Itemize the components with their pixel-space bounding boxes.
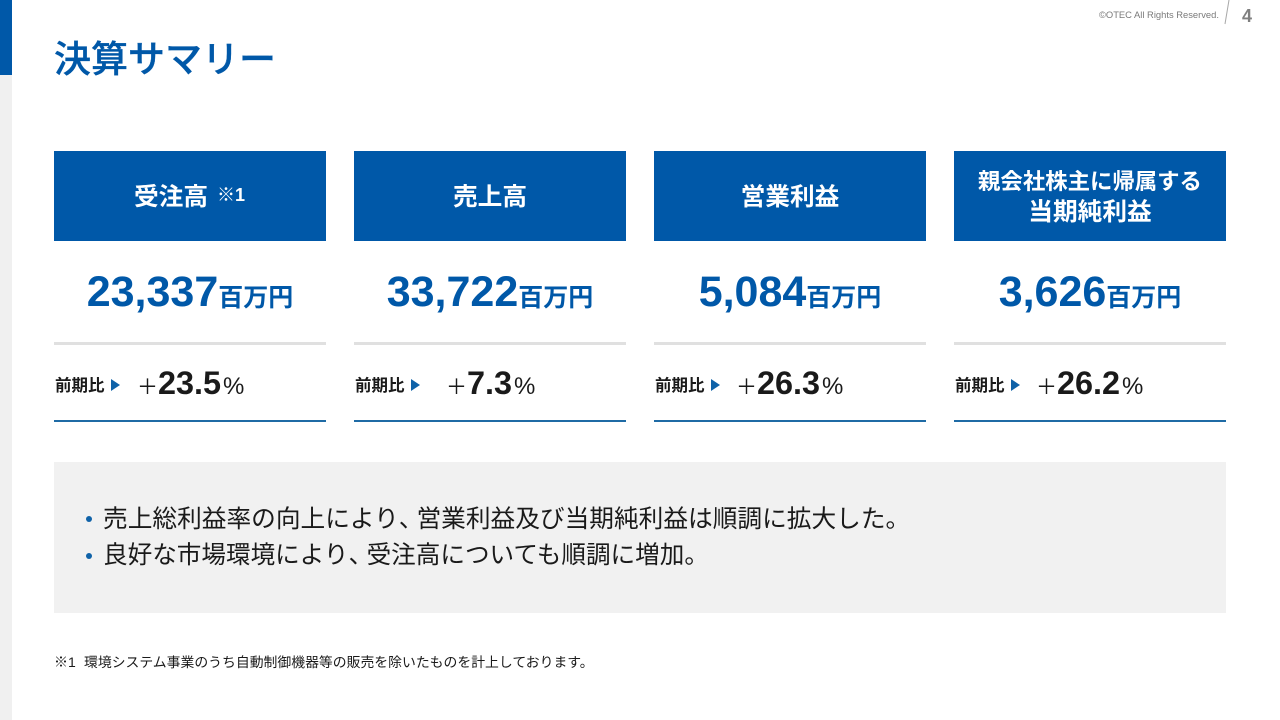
panel: operating profit header: 営業利益 [741,184,839,211]
commentary line 1: 売上総利益率の向上により、営業利益及び当期純利益は順調に拡大した。 [103,506,910,533]
net income bottom rule [954,420,1226,422]
net income divider [954,342,1226,345]
panel: operating profit header [654,151,926,241]
net income yoy change: ＋26.2% [1036,365,1143,401]
panel: sales header: 売上高 [453,184,527,211]
bullet 1 [86,516,92,522]
operating profit bottom rule [654,420,926,422]
net income yoy label: 前期比 [955,377,1004,395]
page number divider [1224,0,1230,24]
operating profit yoy change: ＋26.3% [736,365,843,401]
panel: net income header: 当期純利益 [1028,199,1152,226]
page number: 4 [1242,6,1252,26]
panel: net income header [954,151,1226,241]
operating profit value: 5,084百万円 [699,268,881,316]
sales value: 33,722百万円 [387,268,593,316]
sales yoy label: 前期比 [355,377,404,395]
left sidebar strip [0,0,12,720]
icon: net income triangle [1011,379,1020,391]
footnote marker: ※1 [54,654,76,670]
icon: orders triangle [111,379,120,391]
panel: net income header: 親会社株主に帰属する [978,169,1202,194]
icon: operating profit triangle [711,379,720,391]
panel: orders header: 受注高 [134,184,208,211]
orders value: 23,337百万円 [87,268,293,316]
title: 決算サマリー [54,39,276,80]
panel: sales header [354,151,626,241]
left accent bar [0,0,12,75]
footnote: 環境システム事業のうち自動制御機器等の販売を除いたものを計上しております。 [84,654,594,670]
operating profit divider [654,342,926,345]
sales yoy change: ＋7.3% [446,365,535,401]
sales bottom rule [354,420,626,422]
bullet 2 [86,553,92,559]
panel: orders header: ※1 [217,185,245,205]
icon: sales triangle [411,379,420,391]
orders yoy change: ＋23.5% [137,365,244,401]
commentary line 2: 良好な市場環境により、受注高についても順調に増加。 [103,542,709,569]
panel: orders header [54,151,326,241]
net income value: 3,626百万円 [999,268,1181,316]
orders divider [54,342,326,345]
panel: commentary [54,462,1226,613]
copyright: ©OTEC All Rights Reserved. [1099,9,1219,20]
orders yoy label: 前期比 [55,377,104,395]
operating profit yoy label: 前期比 [655,377,704,395]
orders bottom rule [54,420,326,422]
sales divider [354,342,626,345]
